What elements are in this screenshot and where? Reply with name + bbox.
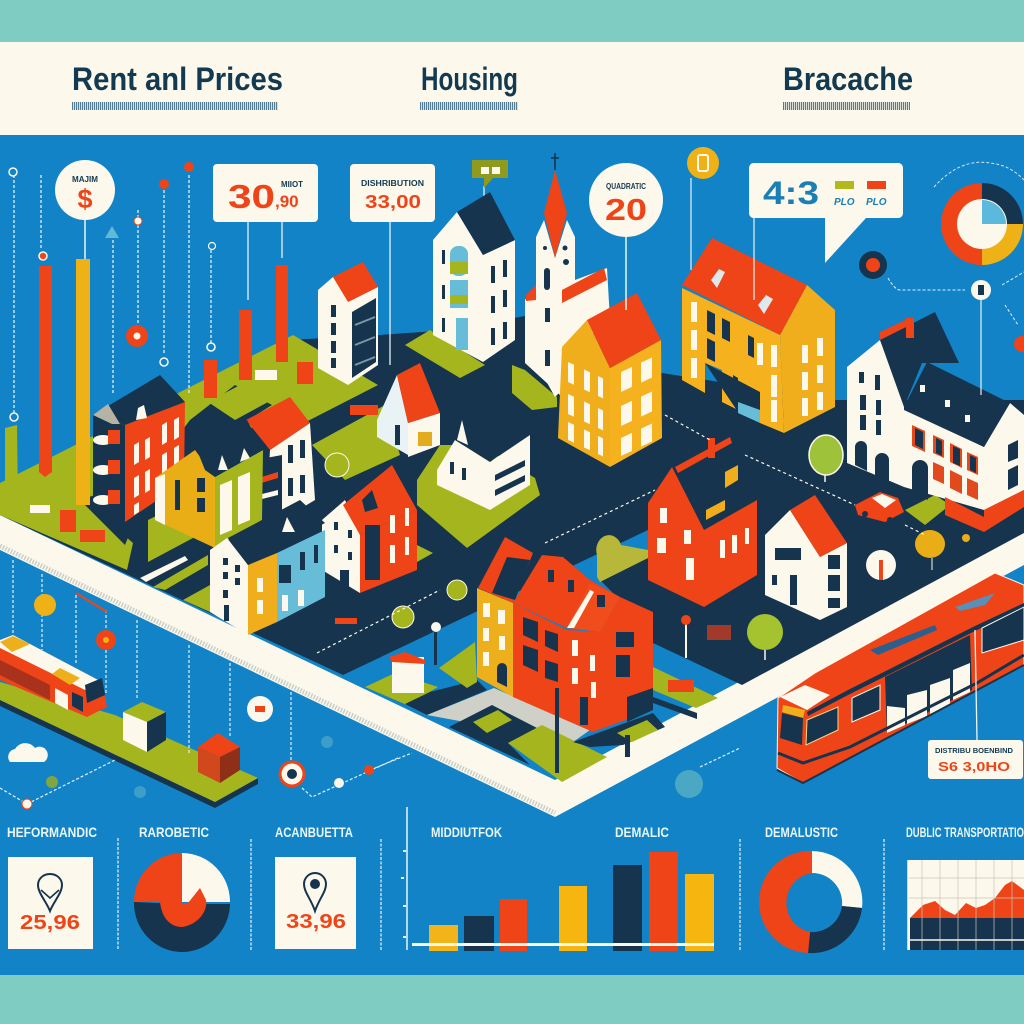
section labels (7, 824, 1024, 840)
stat card: 33,96: 33,96 (286, 911, 346, 933)
building: white yellow blue house (210, 500, 325, 635)
car (855, 492, 904, 523)
callout: 30,90: ,90 (275, 192, 299, 211)
building: yellow corner house (558, 293, 662, 467)
heading: rental prices: Rent anl Prices (72, 61, 283, 97)
callout: 33,00: 33,00 (365, 192, 421, 212)
building: olive house (155, 420, 263, 548)
stat card: 33,96 (275, 857, 356, 949)
donut chart (759, 851, 862, 953)
heading: housing: Housing (421, 61, 518, 97)
street items (30, 362, 731, 773)
building: church (525, 153, 610, 397)
callout: dollar circle: $ (77, 184, 93, 214)
pie chart (134, 853, 230, 952)
icon: yellow coin (687, 147, 719, 270)
building: big yellow apartment (682, 238, 835, 433)
distribution label: DISTRIBU BOENBIND (935, 748, 1013, 755)
building: small white with red roof (377, 363, 440, 457)
callout: 33,00 (350, 164, 435, 365)
callout: circle 20: 20 (605, 192, 647, 227)
lower green rail strip (0, 682, 258, 808)
building: tall white with dark roof (433, 192, 515, 362)
small tram (0, 635, 107, 717)
section labels: DEMALUSTIC (765, 824, 838, 840)
callout: speech bubble 4:3: PLO (866, 197, 887, 208)
callout: speech bubble 4:3 (749, 163, 903, 300)
isometric ground plate (0, 315, 1024, 817)
distribution label: S6 3,0HO (938, 759, 1010, 774)
bar chart (401, 807, 714, 951)
callout: dollar circle: MAJIM (72, 175, 98, 184)
large tram (777, 573, 1024, 783)
building: white low rise dark roof (437, 397, 530, 510)
building: white row house dark roof (847, 312, 959, 487)
callout: circle 20: QUADRATIC (606, 182, 646, 191)
stat card: 25,96: 25,96 (20, 912, 80, 934)
price bars with connector lines (5, 162, 288, 505)
heading: brachache: Bracache (783, 61, 913, 97)
donut chart top right (934, 162, 1024, 265)
dashed dividers (118, 838, 884, 950)
callout: 33,00: DISHRIBUTION (361, 179, 424, 188)
section labels: ACANBUETTA (275, 824, 353, 840)
callout: 30,90: MIIOT (281, 180, 303, 189)
section labels: HEFORMANDIC (7, 824, 97, 840)
line chart (908, 860, 1024, 950)
connector network (859, 251, 1024, 395)
section labels: DEMALIC (615, 824, 669, 840)
header band (0, 42, 1024, 135)
building: white tower red roof (318, 262, 378, 385)
section labels: RAROBETIC (139, 824, 209, 840)
trees (325, 435, 970, 660)
building: red house dark roof (648, 435, 757, 607)
callout: speech bubble 4:3: PLO (834, 197, 855, 208)
building: white house red roof (behind olive) (246, 397, 315, 530)
callout: olive tag (472, 160, 508, 205)
callout: dollar circle (55, 160, 115, 259)
building: white corner house with red base (904, 362, 1024, 532)
section labels: MIDDIUTFOK (431, 824, 502, 840)
building: red apartment left (93, 375, 185, 522)
lower-left blocks and markers (0, 560, 740, 809)
stat card: 25,96 (8, 857, 93, 949)
callout: 30,90 (213, 164, 318, 300)
building: central red block with jagged roof (477, 537, 653, 732)
central plaza pavements and greens (365, 535, 718, 782)
road dashes (317, 415, 925, 653)
callout: speech bubble 4:3: 4:3 (763, 175, 819, 211)
callout: circle 20 (589, 163, 663, 310)
building: white house red roof (765, 495, 847, 620)
callout: 30,90: 30 (228, 178, 275, 215)
distribution label (928, 740, 1023, 779)
building: red house center left (322, 465, 417, 593)
